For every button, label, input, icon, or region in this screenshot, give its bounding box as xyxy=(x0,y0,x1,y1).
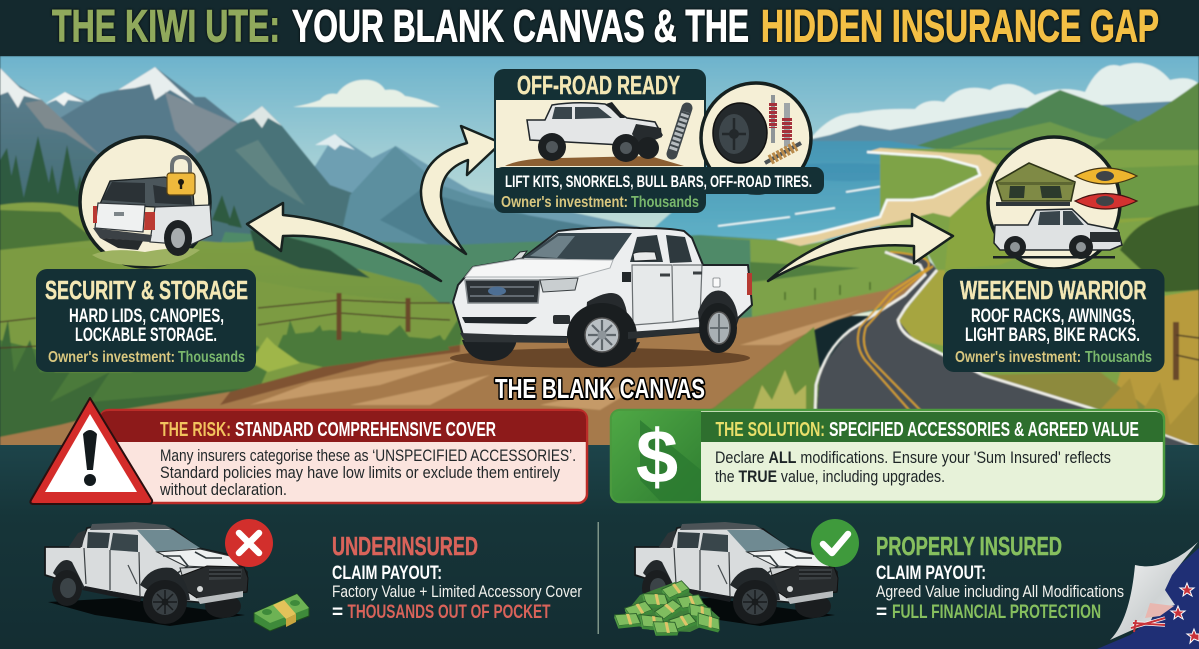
band: caption strip across the panel and circle xyxy=(494,167,824,194)
central white ute: the blank canvas xyxy=(450,227,752,368)
panel: off-road ready xyxy=(494,69,824,213)
box: security and storage text xyxy=(36,269,256,372)
text: protected result xyxy=(876,602,1101,623)
lower dark panel background xyxy=(0,445,1199,649)
heading: the risk xyxy=(160,419,496,441)
icon: tyre and shock absorbers circle xyxy=(701,83,811,193)
text: owner's investment: Thousands xyxy=(631,194,699,211)
tub and tailgate xyxy=(150,205,212,245)
icon: damaged ute xyxy=(635,522,838,626)
icon: pile of cash xyxy=(612,580,724,641)
far front wheel xyxy=(462,340,517,361)
heading: the solution xyxy=(716,419,1139,441)
icon: warning triangle xyxy=(30,398,152,504)
text: risk explanation: without declaration. xyxy=(159,481,287,499)
text: protected result: = xyxy=(876,602,887,623)
box: security and storage text: LOCKABLE STORAGE. xyxy=(75,325,217,346)
land beyond the beach xyxy=(880,148,1199,447)
clouds: right sky xyxy=(808,63,1199,142)
arrow: ute to security and storage xyxy=(247,203,441,281)
box: security and storage text: Thousands xyxy=(178,349,245,366)
distant hills xyxy=(780,82,1199,190)
box: security and storage text: HARD LIDS, CANOPIES, xyxy=(69,306,224,327)
forest: dark pines on the left xyxy=(0,136,242,228)
text: protected result: FULL FINANCIAL PROTECTION xyxy=(892,602,1101,623)
panel: the solution xyxy=(611,410,1164,502)
text: lift kits list: LIFT KITS, SNORKELS, BULL BARS, OFF-ROAD TIRES. xyxy=(505,172,812,191)
icon: red cross badge xyxy=(225,519,273,567)
text: underinsured result: = xyxy=(332,602,343,623)
grille and badge xyxy=(465,280,540,303)
text: owner's investment: Owner's investment: xyxy=(501,194,628,211)
icon: lifted ute on dirt xyxy=(505,102,687,166)
text: claim payout label: CLAIM PAYOUT: xyxy=(332,563,442,584)
label: the blank canvas: THE BLANK CANVAS xyxy=(495,373,705,404)
heading: off-road ready: OFF-ROAD READY xyxy=(517,70,680,100)
icon: small stack of cash xyxy=(254,594,309,631)
cloud: left sky xyxy=(293,80,440,107)
section: properly insured outcome xyxy=(612,519,1124,641)
text: payout detail: Agreed Value including All Modifications xyxy=(876,583,1124,601)
icon: green tick badge xyxy=(811,519,859,567)
front wheel xyxy=(585,293,627,330)
icon: ute with roof tent and kayaks xyxy=(988,137,1137,269)
heading: underinsured: UNDERINSURED xyxy=(332,531,478,561)
sandy beach xyxy=(777,148,997,246)
text: solution explanation: the TRUE value, including upgrades. xyxy=(715,467,945,486)
canopy xyxy=(100,177,194,207)
dark foreground grass xyxy=(0,300,470,437)
box: security and storage text: Owner's investment: xyxy=(48,349,175,366)
icon: damaged ute xyxy=(45,522,248,626)
background: New Zealand landscape scene xyxy=(0,56,1199,447)
text: risk explanation xyxy=(159,447,576,499)
cab and body xyxy=(453,227,752,342)
text: risk explanation: Standard policies may have low limits or exclude them entirely xyxy=(160,464,561,482)
hood line xyxy=(465,259,613,277)
rolling green fields xyxy=(0,165,1199,447)
title banner xyxy=(0,0,1199,56)
dirt track xyxy=(0,270,932,447)
text: risk explanation: Many insurers categorise these as ‘UNSPECIFIED ACCESSORIES’. xyxy=(160,447,576,465)
post and wire fences xyxy=(0,282,1199,380)
text: underinsured result xyxy=(332,602,551,623)
padlock xyxy=(172,157,190,175)
icon: page curl revealing New Zealand flag xyxy=(1097,542,1199,649)
arrow: ute to off-road ready xyxy=(421,126,501,254)
text: claim payout label: CLAIM PAYOUT: xyxy=(876,563,986,584)
title: green segment: THE KIWI UTE: xyxy=(52,0,280,52)
text: solution explanation: Declare ALL modifications. Ensure your 'Sum Insured' reflects xyxy=(715,448,1111,467)
sealed road with centre lines xyxy=(814,252,1199,447)
section: underinsured outcome xyxy=(45,519,582,631)
heading: properly insured: PROPERLY INSURED xyxy=(876,531,1062,561)
rear wheel xyxy=(698,291,738,330)
door lines xyxy=(632,265,702,325)
title: white segment: YOUR BLANK CANVAS & THE xyxy=(292,0,749,52)
box: weekend warrior text: Thousands xyxy=(1085,349,1152,366)
box: weekend warrior text: Owner's investment: xyxy=(955,349,1081,366)
box: weekend warrior text xyxy=(943,269,1164,372)
side step xyxy=(628,327,700,339)
icon: ute with canopy and padlock xyxy=(80,137,212,267)
text: underinsured result: THOUSANDS OUT OF POCKET xyxy=(348,602,551,623)
panel: the risk xyxy=(30,398,587,504)
heading: the risk: STANDARD COMPREHENSIVE COVER xyxy=(235,419,496,441)
icon: dollar sign badge xyxy=(612,411,701,501)
roadside grass verge xyxy=(650,327,820,447)
heading: the risk: THE RISK: xyxy=(160,419,231,441)
panel: weekend warrior xyxy=(943,137,1164,372)
text: solution explanation xyxy=(715,448,1111,486)
panel: security and storage xyxy=(36,137,256,372)
grass tufts xyxy=(250,320,1199,447)
box: weekend warrior text: ROOF RACKS, AWNINGS, xyxy=(971,306,1135,327)
heading: the solution: THE SOLUTION: xyxy=(716,419,825,441)
text: payout detail: Factory Value + Limited Accessory Cover xyxy=(332,583,582,601)
arrow: ute to weekend warrior xyxy=(768,214,953,281)
bumper details xyxy=(462,317,537,324)
icon: dollar sign badge: $ xyxy=(636,415,678,500)
bay and waves xyxy=(640,141,1000,240)
mountains: left range xyxy=(0,67,700,260)
box: security and storage text: SECURITY & STORAGE xyxy=(45,275,248,305)
